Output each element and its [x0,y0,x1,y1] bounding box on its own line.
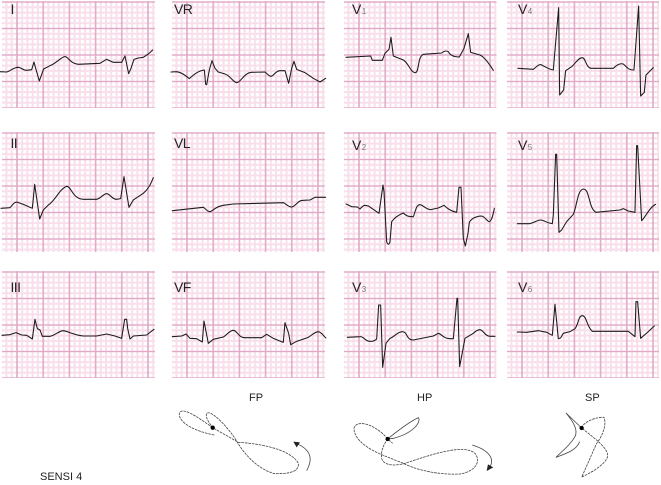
arrow: FP rotation [293,442,310,471]
panel: lead V1 [344,1,496,108]
label: VL: VL [174,135,191,151]
grid: lead V6 [507,271,659,378]
panel: lead VL [172,132,326,252]
panel: lead V5 [507,132,659,252]
vector loop: SP [556,413,608,477]
panel: lead VR [171,1,326,108]
label: V6: V6 [518,279,533,295]
trace: lead VL [172,197,326,212]
label: II: II [10,135,17,151]
vector loop: FP [179,411,298,474]
panel: lead V4 [507,1,659,108]
trace: lead V3 [347,298,495,367]
grid: lead VL [172,132,325,252]
trace: lead I [0,50,153,81]
grid: lead II [2,132,155,252]
label: VF: VF [174,279,191,295]
heading: FP: FP [249,392,263,404]
grid: lead VR [172,1,325,108]
trace: lead V6 [517,302,654,339]
grid: lead VF [172,271,325,378]
heading: HP: HP [417,392,432,404]
label: V2: V2 [352,137,367,153]
grid: lead III [2,271,155,378]
vector loop: HP [354,418,478,474]
trace: lead II [1,177,153,219]
panel: lead V6 [507,271,659,378]
grid: lead V5 [507,132,659,252]
grid: lead V3 [344,271,496,378]
label: V3: V3 [352,279,367,295]
trace: lead V2 [346,185,494,246]
grid: lead V2 [344,132,496,252]
trace: lead V4 [518,6,653,96]
label: I: I [10,1,14,17]
grid: lead I [2,1,155,108]
label: V5: V5 [518,137,533,153]
panel: lead I [0,1,155,108]
arrow: HP rotation [472,445,493,471]
caption: SENSI 4: SENSI 4 [40,471,82,483]
label: VR: VR [174,1,193,17]
trace: lead V5 [517,146,656,232]
trace: lead VR [171,61,326,85]
panel: lead II [1,132,155,252]
panel: lead VF [172,271,326,378]
panel: lead III [2,271,155,378]
grid: lead V4 [507,1,659,108]
label: V4: V4 [518,1,533,17]
trace: lead V1 [346,34,493,73]
label: III: III [10,279,20,295]
heading: SP: SP [585,392,600,404]
label: V1: V1 [352,1,367,17]
panel: lead V2 [344,132,496,252]
panel: lead V3 [344,271,496,378]
trace: lead VF [172,321,326,345]
trace: lead III [2,319,154,339]
grid: lead V1 [344,1,496,108]
